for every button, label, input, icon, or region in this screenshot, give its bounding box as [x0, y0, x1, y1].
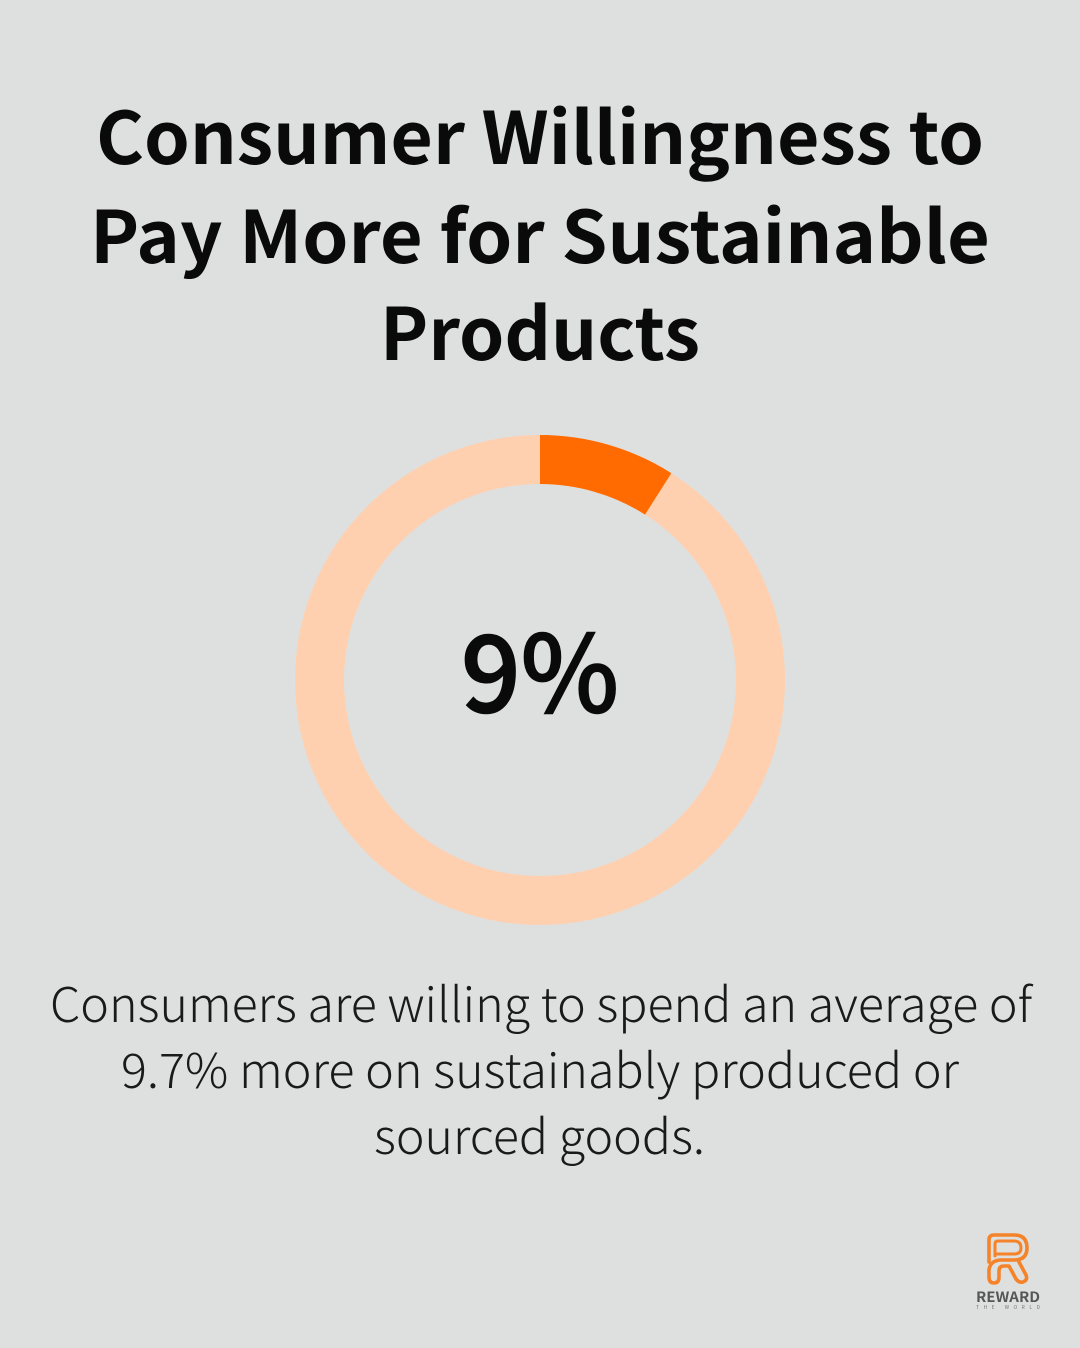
description: Consumers are willing to spend an average of [50, 966, 1034, 1036]
description: sourced goods. [374, 1098, 705, 1168]
logo tagline: THE WORLD [976, 1304, 1041, 1311]
title: Consumer Willingness to [96, 80, 984, 185]
description: 9.7% more on sustainably produced or [121, 1032, 960, 1102]
title: Products [380, 276, 700, 381]
title [90, 80, 990, 381]
icon: R mark [989, 1235, 1027, 1283]
logo: Reward the World [976, 1235, 1041, 1311]
logo wordmark: REWARD [976, 1287, 1040, 1307]
donut chart [320, 435, 760, 900]
description [50, 966, 1034, 1168]
donut value: 9% [461, 589, 619, 743]
title: Pay More for Sustainable [90, 179, 990, 284]
